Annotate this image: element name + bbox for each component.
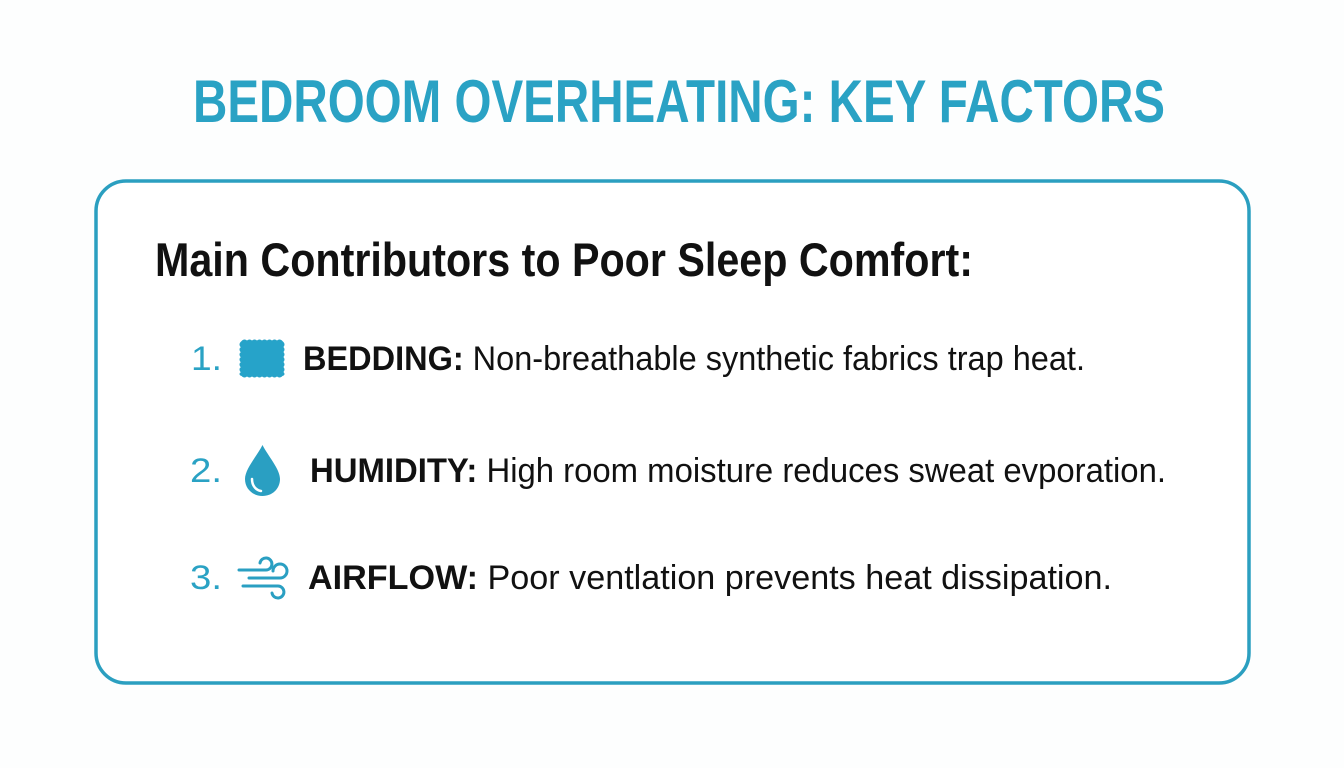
item 1: bedding: BEDDING: Non-breathable synthetic fabrics trap heat. xyxy=(303,340,1085,378)
item 3: airflow: AIRFLOW: Poor ventlation prevents heat dissipation. xyxy=(308,559,1112,597)
icon: water drop xyxy=(245,445,280,496)
panel: main contributors xyxy=(96,181,1249,683)
item 3: airflow: 3. xyxy=(190,559,222,597)
subheading: Main Contributors to Poor Sleep Comfort: xyxy=(155,233,973,286)
item 1: bedding: 1. xyxy=(191,340,222,378)
icon: fabric swatch xyxy=(240,340,284,376)
item 2: humidity: 2. xyxy=(190,452,222,490)
item 2: humidity: HUMIDITY: High room moisture reduces sweat evporation. xyxy=(310,452,1166,490)
item 2: humidity xyxy=(190,445,1166,496)
icon: wind xyxy=(239,558,287,598)
